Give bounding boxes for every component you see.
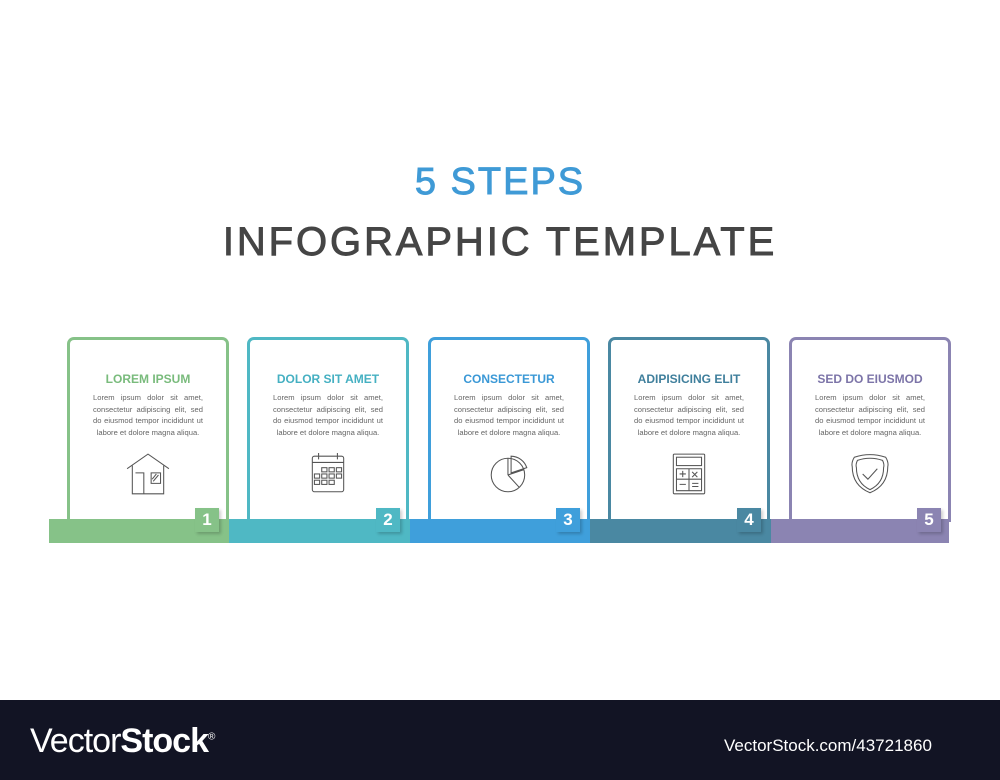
number 1: 1 <box>202 510 212 529</box>
bar segment 2 <box>229 519 410 543</box>
number 3: 3 <box>563 510 573 529</box>
heading 1: LOREM IPSUM <box>106 372 190 386</box>
heading 5: SED DO EIUSMOD <box>817 372 923 386</box>
icon: calendar <box>312 453 344 492</box>
number 4 <box>737 508 761 532</box>
number 3 <box>556 508 580 532</box>
icon: pie chart <box>490 456 528 492</box>
footer url: VectorStock.com/43721860 <box>724 736 932 755</box>
panel: step 1 <box>67 337 229 522</box>
bar segment 4 <box>590 519 771 543</box>
footer <box>0 700 1000 780</box>
icon: house <box>126 454 170 494</box>
panel: step 5 <box>789 337 951 522</box>
panel: step 3 <box>428 337 590 522</box>
number 5: 5 <box>924 510 934 529</box>
panel: step 2 <box>247 337 409 522</box>
footer logo: VectorStock® <box>30 722 214 760</box>
text 3: Lorem ipsum dolor sit amet, consectetur adipiscing elit, sed do eiusmod tempor incididunt ut labore et dolore magna aliqua. <box>454 393 564 437</box>
panel: step 4 <box>608 337 770 522</box>
bar segment 1 <box>49 519 229 543</box>
text 1: Lorem ipsum dolor sit amet, consectetur adipiscing elit, sed do eiusmod tempor incididunt ut labore et dolore magna aliqua. <box>93 393 203 437</box>
title line 1: 5 STEPS <box>415 161 585 203</box>
text 4: Lorem ipsum dolor sit amet, consectetur adipiscing elit, sed do eiusmod tempor incididunt ut labore et dolore magna aliqua. <box>634 393 744 437</box>
icon: calculator <box>672 454 706 494</box>
icon: shield <box>851 454 889 494</box>
heading 3: CONSECTETUR <box>463 372 555 386</box>
number 2: 2 <box>383 510 393 529</box>
number 2 <box>376 508 400 532</box>
bar segment 3 <box>410 519 590 543</box>
bar segment 5 <box>771 519 949 543</box>
number 4: 4 <box>744 510 754 529</box>
number 1 <box>195 508 219 532</box>
title line 2: INFOGRAPHIC TEMPLATE <box>223 220 777 264</box>
heading 4: ADIPISICING ELIT <box>638 372 740 386</box>
number 5 <box>917 508 941 532</box>
text 5: Lorem ipsum dolor sit amet, consectetur adipiscing elit, sed do eiusmod tempor incididunt ut labore et dolore magna aliqua. <box>815 393 925 437</box>
heading 2: DOLOR SIT AMET <box>277 372 379 386</box>
text 2: Lorem ipsum dolor sit amet, consectetur adipiscing elit, sed do eiusmod tempor incididunt ut labore et dolore magna aliqua. <box>273 393 383 437</box>
